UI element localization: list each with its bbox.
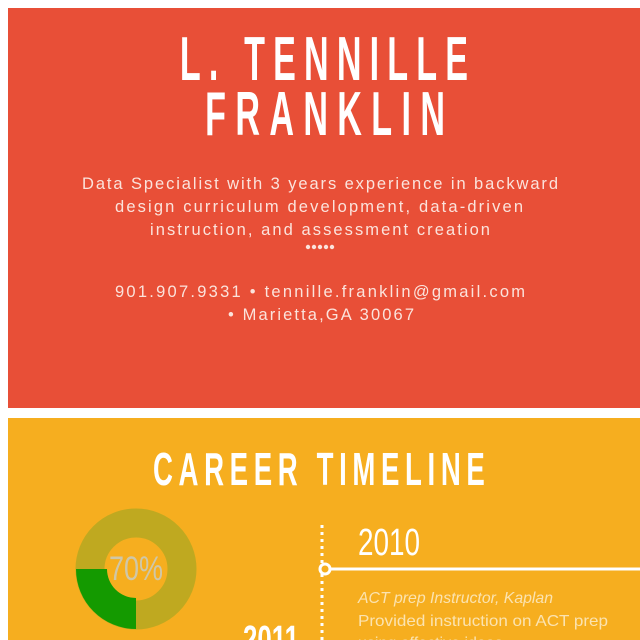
contact info — [115, 283, 525, 324]
donut chart 70%: 70% — [109, 550, 163, 588]
panel: header — [8, 8, 640, 408]
heading: CAREER TIMELINE — [153, 445, 485, 496]
summary text — [82, 175, 558, 239]
title: L. TENNILLE — [180, 24, 468, 94]
dots divider — [306, 245, 334, 249]
summary text: instruction, and assessment creation — [150, 221, 490, 239]
job entry 2010 — [357, 590, 608, 640]
panel: career timeline — [8, 418, 640, 640]
title: FRANKLIN — [205, 79, 445, 149]
title — [180, 24, 468, 149]
timeline axis — [320, 525, 640, 640]
contact info: 901.907.9331 • tennille.franklin@gmail.com — [115, 283, 525, 301]
year 2010: 2010 — [358, 522, 420, 564]
job entry 2010: ACT prep Instructor, Kaplan — [357, 590, 553, 607]
job entry 2010: Provided instruction on ACT prep — [358, 613, 608, 630]
summary text: design curriculum development, data-driven — [115, 198, 523, 216]
summary text: Data Specialist with 3 years experience in backward — [82, 175, 558, 193]
contact info: • Marietta,GA 30067 — [228, 306, 414, 324]
donut chart 70% — [76, 523, 182, 629]
